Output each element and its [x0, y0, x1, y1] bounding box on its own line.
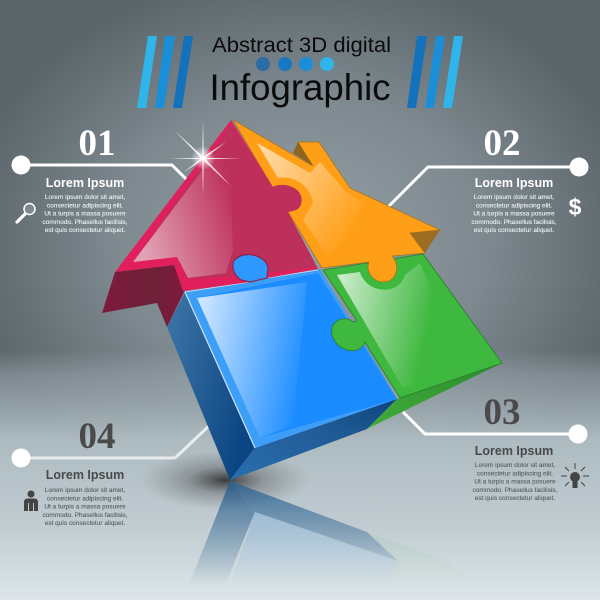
block 01 — [43, 123, 128, 234]
number 03: 03 — [484, 392, 520, 433]
blue left side — [167, 292, 255, 480]
number 01: 01 — [78, 123, 116, 164]
icon: magnifier — [17, 204, 35, 222]
connector 03 — [403, 412, 588, 444]
icon: light bulb — [561, 463, 589, 488]
title stripes left — [137, 36, 193, 108]
body 02: est quis consectetur aliquet. — [474, 227, 554, 234]
connector 04 — [12, 425, 210, 468]
heading 03: Lorem Ipsum — [475, 444, 553, 458]
blue knob — [233, 255, 268, 282]
body 03: Ut a turpis a massa posuere — [474, 478, 556, 486]
block 02 — [472, 123, 557, 234]
heading 02: Lorem Ipsum — [475, 176, 553, 190]
body 03: est quis consectetur aliquet. — [475, 495, 555, 502]
heading 01: Lorem Ipsum — [46, 176, 124, 190]
house reflection — [192, 481, 427, 579]
body 04: consectetur adipiscing elit. — [47, 495, 123, 502]
body 04: Lorem ipsum dolor sit amet, — [45, 487, 125, 494]
title line 2: Infographic — [210, 67, 390, 108]
orange chimney and roof sides — [293, 142, 440, 253]
title line 1: Abstract 3D digital — [212, 33, 391, 57]
block 03 — [473, 392, 558, 502]
3D puzzle house — [102, 120, 502, 480]
body 02: Lorem ipsum dolor sit amet, — [474, 194, 554, 201]
body 04: est quis consectetur aliquet. — [45, 520, 125, 527]
body 02: commodo. Phasellus facilisis, — [472, 219, 557, 226]
body 01: est quis consectetur aliquet. — [45, 227, 125, 234]
green piece — [323, 254, 502, 398]
body 03: commodo. Phasellus facilisis, — [473, 487, 558, 494]
body 01: Ut a turpis a massa posuere — [44, 210, 126, 218]
blue piece — [185, 269, 397, 448]
body 02: consectetur adipiscing elit. — [476, 202, 552, 209]
body 02: Ut a turpis a massa posuere — [473, 210, 555, 218]
connector 02 — [385, 158, 588, 210]
title stripes right — [407, 36, 463, 108]
block 04 — [43, 416, 128, 527]
green bottom side — [367, 363, 502, 429]
number 02: 02 — [484, 123, 520, 164]
body 04: Ut a turpis a massa posuere — [44, 504, 126, 510]
orange piece — [233, 120, 440, 282]
red piece — [115, 120, 318, 291]
number 04: 04 — [78, 416, 116, 457]
icon: businessman — [24, 490, 38, 511]
body 04: commodo. Phasellus facilisis, — [43, 512, 128, 519]
body 01: Lorem ipsum dolor sit amet, — [45, 194, 125, 201]
body 01: commodo. Phasellus facilisis, — [43, 219, 128, 226]
body 03: consectetur adipiscing elit. — [477, 470, 553, 477]
body 03: Lorem ipsum dolor sit amet, — [475, 462, 555, 469]
body 01: consectetur adipiscing elit. — [47, 202, 123, 209]
red piece side — [102, 265, 185, 327]
heading 04: Lorem Ipsum — [46, 468, 124, 482]
floor shadow — [140, 450, 310, 510]
blue bottom side — [230, 399, 397, 480]
title dots — [256, 57, 334, 71]
connector 01 — [12, 156, 190, 183]
icon: dollar: $ — [569, 194, 582, 220]
sparkle — [170, 120, 241, 196]
